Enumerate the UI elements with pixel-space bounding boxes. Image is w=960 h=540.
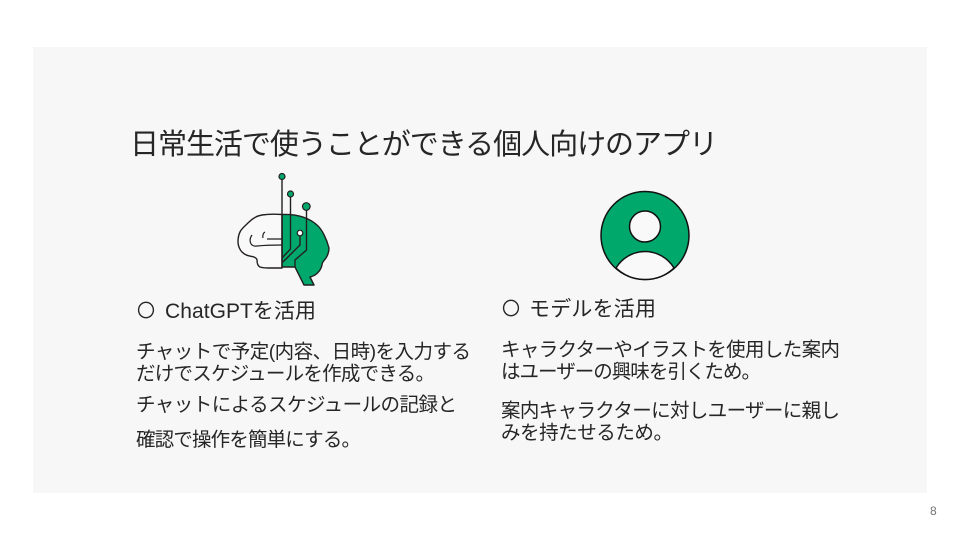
left heading marker: 〇 (137, 301, 155, 321)
left body: line 4: 確認で操作を簡単にする。 (136, 429, 361, 451)
left body: line 2: だけでスケジュールを作成できる。 (136, 363, 435, 385)
right body: line 2: はユーザーの興味を引くため。 (501, 361, 761, 383)
right body: line 4: みを持たせるため。 (501, 422, 673, 444)
page number: 8 (930, 504, 937, 518)
right body: line 3: 案内キャラクターに対しユーザーに親し (501, 400, 840, 422)
left body: line 1: チャットで予定(内容、日時)を入力する (136, 341, 471, 363)
right body: line 1: キャラクターやイラストを使用した案内 (501, 339, 840, 361)
panel: background (33, 47, 927, 493)
left heading: ChatGPTを活用 (165, 300, 316, 323)
right heading: モデルを活用 (529, 298, 656, 321)
icon: brain with circuit (238, 174, 329, 285)
title: 日常生活で使うことができる個人向けのアプリ (130, 128, 718, 161)
right column text (501, 298, 840, 444)
left body: line 3: チャットによるスケジュールの記録と (136, 394, 457, 416)
icon: user avatar (601, 192, 689, 280)
right heading marker: 〇 (502, 299, 520, 319)
left column text (136, 300, 471, 451)
